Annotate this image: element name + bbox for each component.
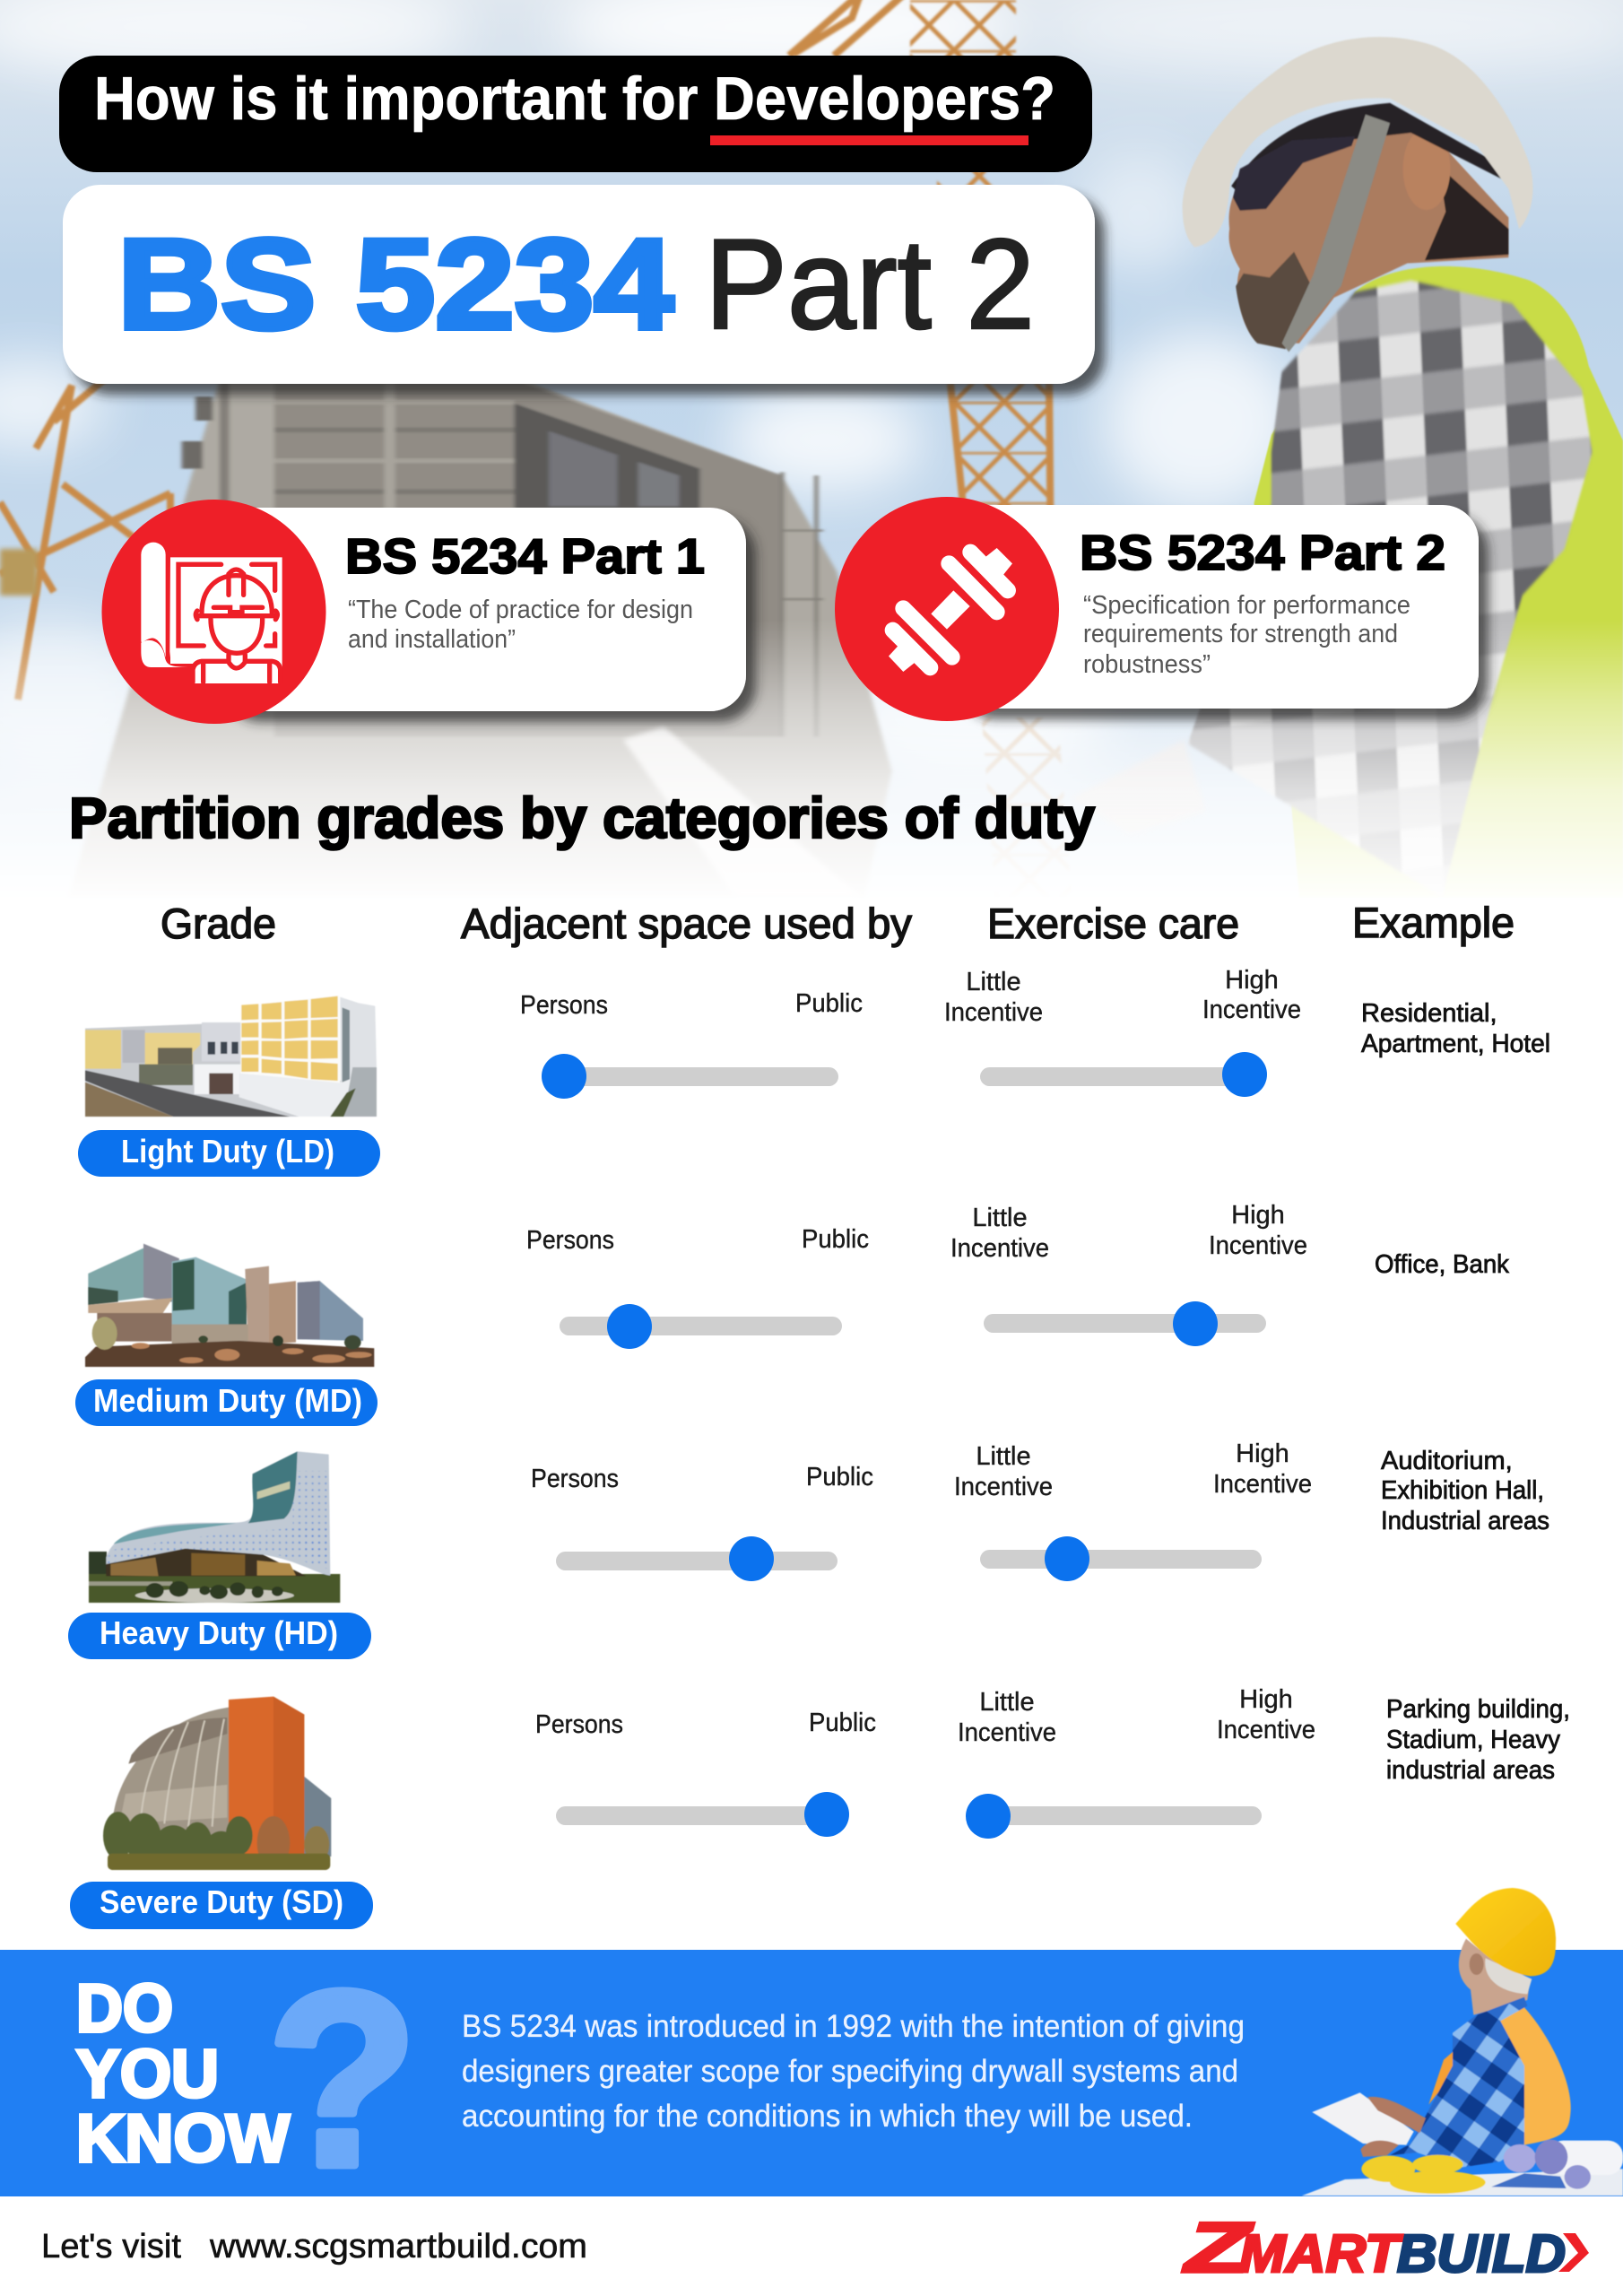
example text: Apartment, Hotel — [1361, 1030, 1550, 1058]
icon: engineer with blueprint — [141, 543, 282, 683]
photo: medium duty building — [85, 1244, 374, 1367]
slider labels: exercise care: High — [1236, 1439, 1289, 1468]
slider labels: exercise care: High — [1231, 1201, 1285, 1230]
slider labels: exercise care: Incentive — [1209, 1231, 1307, 1260]
heading: BS 5234: BS 5234 — [117, 213, 673, 356]
row 2 sliders: medium duty — [526, 1201, 1509, 1349]
slider: adjacent space, fairly public — [556, 1536, 838, 1581]
clouds — [0, 0, 1623, 780]
slider labels: adjacent space: Persons — [520, 991, 608, 1020]
grade label: light duty — [78, 1130, 380, 1177]
main heading panel — [63, 185, 1095, 384]
card description: “Specification for performance — [1083, 591, 1410, 620]
slider labels: exercise care — [944, 966, 1301, 1027]
slider labels: exercise care: Little — [979, 1688, 1035, 1717]
background photo: construction site and worker — [0, 0, 1623, 906]
table column headers: Example — [1352, 899, 1515, 946]
slider: exercise care, fairly high — [984, 1301, 1266, 1346]
white fade at base of photo — [0, 619, 1623, 906]
gloves — [1361, 2155, 1486, 2194]
rolled plans — [1504, 2140, 1623, 2189]
tower cranes — [0, 0, 1072, 897]
slider labels: adjacent space: Public — [806, 1463, 873, 1492]
slider labels: adjacent space — [535, 1709, 876, 1739]
table — [1302, 2169, 1623, 2196]
fact text — [462, 2009, 1245, 2134]
ear — [1402, 127, 1450, 210]
hard hat — [1183, 37, 1532, 248]
slider labels: exercise care: High — [1225, 966, 1279, 995]
card title: BS 5234 Part 2 — [1080, 525, 1445, 580]
fact text: accounting for the conditions in which they will be used. — [462, 2099, 1193, 2134]
slider labels: adjacent space — [520, 989, 863, 1020]
slider labels: exercise care — [958, 1685, 1315, 1747]
table column headers — [161, 899, 1515, 947]
slider labels: exercise care: Incentive — [1213, 1470, 1312, 1499]
photo: severe duty building — [103, 1697, 331, 1870]
slider labels: adjacent space: Public — [802, 1225, 869, 1254]
example text: Residential, — [1361, 999, 1497, 1028]
row 4 sliders: severe duty — [535, 1685, 1570, 1839]
chevron — [1558, 2233, 1589, 2272]
slider labels: exercise care: Incentive — [1202, 996, 1301, 1024]
slider labels: exercise care: Incentive — [954, 1473, 1053, 1501]
card description — [1083, 591, 1410, 679]
grade label: severe duty — [70, 1882, 373, 1929]
photo: heavy duty building — [89, 1451, 340, 1603]
slider labels: adjacent space: Public — [795, 989, 863, 1018]
slider labels: exercise care: Incentive — [958, 1718, 1056, 1747]
example text — [1381, 1447, 1549, 1535]
panel: BS 5234 Part 1 — [102, 500, 746, 724]
blueprint sheet — [1491, 2173, 1567, 2188]
head — [1459, 1939, 1531, 2015]
panel: BS 5234 Part 2 — [835, 497, 1479, 721]
photo: light duty building — [85, 996, 377, 1117]
fact text: designers greater scope for specifying drywall systems and — [462, 2054, 1238, 2089]
logo: ZmartBuild: Z — [1183, 2207, 1254, 2287]
row 3 sliders: heavy duty — [531, 1439, 1549, 1581]
example text — [1386, 1695, 1570, 1785]
slider labels: exercise care: Little — [972, 1204, 1028, 1232]
do you know heading: YOU — [76, 2036, 219, 2111]
example text: Exhibition Hall, — [1381, 1476, 1544, 1505]
slider labels: exercise care — [954, 1439, 1312, 1501]
slider labels: exercise care: Little — [976, 1442, 1031, 1471]
slider labels: adjacent space: Public — [809, 1709, 876, 1737]
slider labels: adjacent space — [526, 1225, 869, 1255]
heading: Part 2: Part 2 — [705, 213, 1035, 356]
example text: Stadium, Heavy — [1386, 1726, 1560, 1754]
card description: “The Code of practice for design — [348, 596, 693, 624]
logo: ZmartBuild — [1183, 2207, 1589, 2287]
red circle badge — [835, 497, 1059, 721]
row 1 sliders: light duty — [520, 966, 1550, 1099]
grade label: severe duty: Severe Duty (SD) — [100, 1883, 343, 1920]
shirt — [1390, 1997, 1527, 2168]
building under construction — [68, 379, 891, 898]
hair — [1425, 166, 1508, 260]
table column headers: Grade — [161, 900, 276, 947]
slider: adjacent space, near persons — [542, 1054, 838, 1099]
slider: adjacent space, public — [556, 1792, 849, 1837]
crane cab — [0, 549, 38, 596]
card description: robustness” — [1083, 650, 1211, 679]
chin strap — [1282, 115, 1390, 352]
slider labels: exercise care: Little — [966, 968, 1021, 996]
title text: How is it important for Developers? — [94, 65, 1055, 133]
slider: adjacent space, low — [560, 1304, 842, 1349]
grade label: light duty: Light Duty (LD) — [121, 1133, 334, 1170]
beard — [1236, 252, 1312, 349]
logo: ZmartBuild: BUILD — [1397, 2224, 1566, 2283]
grade label: heavy duty: Heavy Duty (HD) — [100, 1614, 338, 1651]
pale foreground slab — [623, 726, 861, 897]
hi-vis vest — [1254, 266, 1623, 897]
worker with hard hat and vest — [1183, 37, 1623, 897]
red underline — [710, 135, 1028, 145]
slider labels: exercise care: Incentive — [950, 1234, 1049, 1263]
slider: exercise care, little — [966, 1794, 1262, 1839]
card description — [348, 596, 693, 654]
logo: ZmartBuild: MART — [1239, 2224, 1403, 2283]
neck and face — [1229, 126, 1508, 344]
slider labels: exercise care: Incentive — [1217, 1716, 1315, 1744]
hard hat — [1455, 1888, 1556, 1976]
table column headers: Adjacent space used by — [461, 900, 912, 947]
grade label: medium duty: Medium Duty (MD) — [93, 1382, 362, 1419]
card description: and installation” — [348, 625, 516, 654]
pale tent shape — [1072, 740, 1206, 834]
example text: industrial areas — [1386, 1756, 1555, 1785]
hands — [1360, 2097, 1426, 2157]
card description: requirements for strength and — [1083, 620, 1398, 648]
slider labels: exercise care — [950, 1201, 1307, 1263]
slider labels: adjacent space: Persons — [535, 1710, 623, 1739]
red circle badge — [102, 500, 326, 724]
example text: Parking building, — [1386, 1695, 1570, 1724]
example text: Office, Bank — [1375, 1250, 1509, 1279]
slider labels: exercise care: High — [1239, 1685, 1293, 1714]
grade label: heavy duty — [68, 1613, 371, 1659]
slider: exercise care, fairly low — [980, 1536, 1262, 1581]
section heading: Partition grades by categories of duty — [69, 786, 1095, 850]
example text: Industrial areas — [1381, 1507, 1549, 1535]
icon: dumbbell — [889, 548, 1012, 672]
safety glasses — [1233, 136, 1355, 211]
do you know heading: KNOW — [76, 2100, 290, 2176]
slider: exercise care, high incentive — [980, 1052, 1267, 1097]
slider labels: adjacent space: Persons — [526, 1226, 614, 1255]
slider labels: exercise care: Incentive — [944, 998, 1043, 1027]
hat band — [1231, 103, 1512, 203]
ear — [1470, 1953, 1484, 1975]
vest front — [1428, 2039, 1468, 2105]
clipboard — [1312, 2092, 1414, 2145]
plaid shirt — [1187, 281, 1593, 897]
table column headers: Exercise care — [987, 900, 1239, 947]
slider labels: adjacent space — [531, 1463, 873, 1493]
vest back — [1491, 2007, 1571, 2145]
title pill — [59, 56, 1092, 172]
fact text: BS 5234 was introduced in 1992 with the intention of giving — [462, 2009, 1245, 2044]
example text: Auditorium, — [1381, 1447, 1513, 1475]
slider labels: adjacent space: Persons — [531, 1465, 619, 1493]
footer: website: www.scgsmartbuild.com — [209, 2228, 587, 2266]
footer: website — [41, 2228, 587, 2266]
panel: did you know banner — [0, 1939, 1623, 2218]
do you know heading: DO — [76, 1970, 173, 2046]
illustration: engineer with clipboard — [1302, 1888, 1623, 2196]
card title: BS 5234 Part 1 — [345, 528, 705, 584]
example text — [1361, 999, 1550, 1058]
do you know heading — [76, 1970, 290, 2176]
footer: website: Let's visit — [41, 2228, 181, 2266]
hair — [1485, 1958, 1532, 1994]
large question mark: ? — [267, 1939, 418, 2218]
